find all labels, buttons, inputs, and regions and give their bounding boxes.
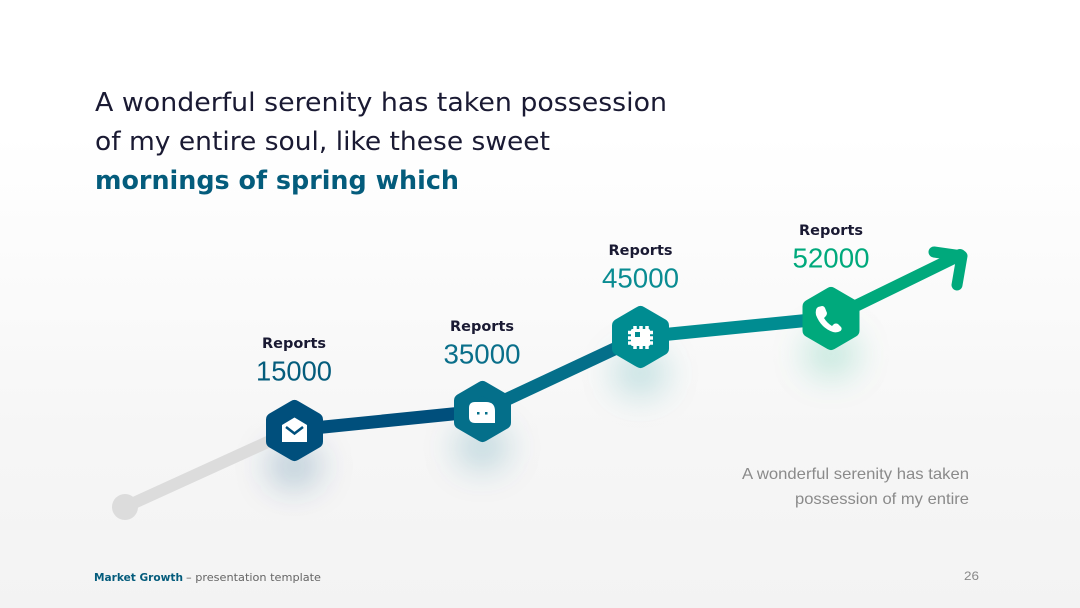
label 2: Reports [450,319,514,335]
node 1: mail icon [273,407,316,454]
node shadows [266,330,859,490]
label 1 [256,336,332,386]
label 4: 52000 [792,242,870,274]
growth chart [112,223,962,520]
label 4 [792,223,870,274]
footer [94,572,321,584]
title [95,88,667,196]
footer: – presentation template [186,572,321,584]
side note: possession of my entire [795,491,969,508]
line segment teal [640,318,831,337]
title: of my entire soul, like these sweet [95,127,550,157]
label 4: Reports [799,223,863,239]
line segment blue teal [482,337,640,411]
label 3 [602,243,679,294]
node 2: chat icon [461,388,504,435]
label 1: 15000 [256,356,332,386]
side note: A wonderful serenity has taken [742,466,969,483]
node 4: phone icon [810,294,852,343]
label 1: Reports [262,336,326,352]
label 2 [444,319,520,370]
node 3: chip icon [619,313,662,361]
side note [742,466,969,508]
page number: 26 [964,569,979,583]
title: mornings of spring which [95,166,459,196]
line segment navy [294,411,482,430]
label 2: 35000 [444,338,520,370]
arrow [831,252,962,318]
label 3: Reports [608,243,672,259]
line start: grey segment [112,430,294,520]
label 3: 45000 [602,262,679,294]
footer: Market Growth [94,572,183,584]
title: A wonderful serenity has taken possession [95,88,667,118]
